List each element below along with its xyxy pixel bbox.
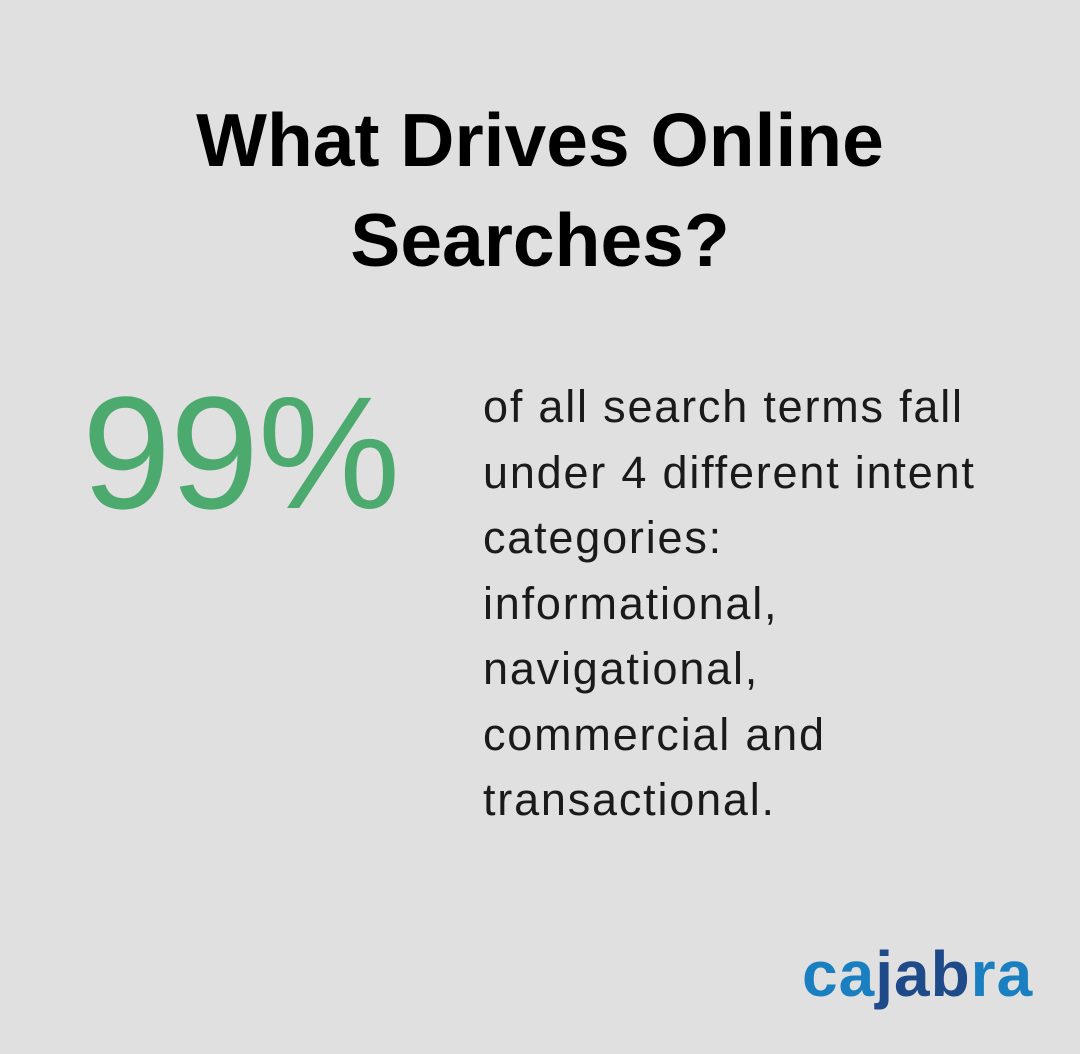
- description text: under 4 different intent: [483, 446, 976, 498]
- description text: commercial and: [483, 708, 826, 760]
- description text: transactional.: [483, 774, 776, 825]
- description text: [483, 381, 976, 825]
- description text: of all search terms fall: [483, 381, 964, 432]
- big stat: 99%: [82, 363, 399, 542]
- title: Searches?: [350, 198, 730, 282]
- description text: categories:: [483, 512, 723, 563]
- description text: informational,: [483, 578, 778, 628]
- title: [196, 98, 884, 282]
- title: What Drives Online: [196, 98, 884, 182]
- description text: navigational,: [483, 643, 759, 694]
- logo: cajabra: [802, 938, 1033, 1010]
